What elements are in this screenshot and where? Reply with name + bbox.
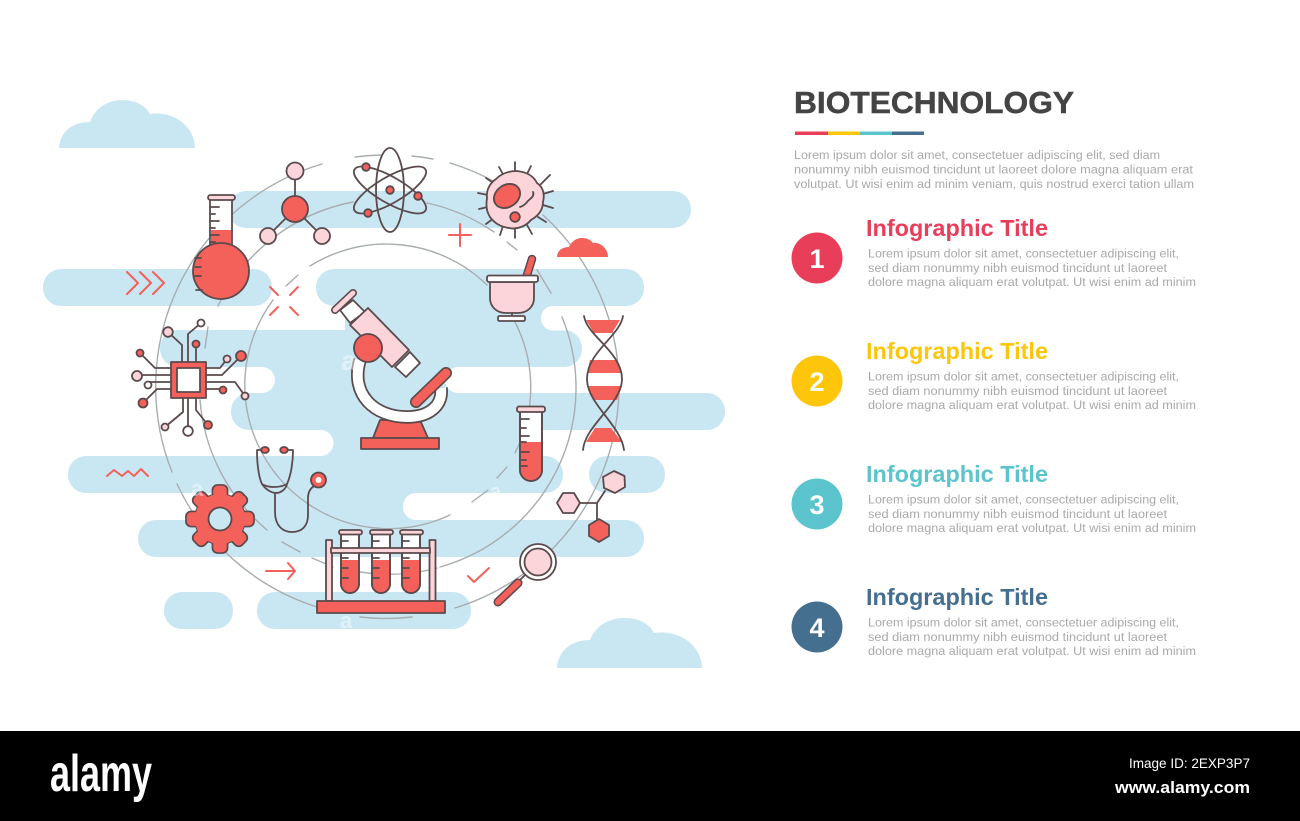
icon: mortar and pestle (487, 259, 538, 321)
watermark marks: a (341, 345, 357, 376)
website: www.alamy.com (1114, 778, 1250, 797)
footer logo: alamy (50, 745, 152, 803)
number badge 2: 2 (809, 367, 825, 397)
item 2 text: dolore magna aliquam erat volutpat. Ut wisi enim ad minim (868, 398, 1196, 412)
icon: circuit chip with nodes (132, 320, 248, 436)
item 3 text: Lorem ipsum dolor sit amet, consectetuer adipiscing elit, (868, 492, 1179, 506)
icon: round-bottom flask (193, 195, 249, 299)
intro paragraph (794, 148, 1194, 191)
decorative red cross burst (270, 287, 298, 315)
item 2 title: Infographic Title (866, 338, 1048, 364)
icon: magnifier (498, 544, 556, 602)
list item 1 (792, 215, 1196, 289)
number badge 3 (792, 478, 842, 530)
item 1 text (868, 246, 1196, 289)
icon: stethoscope (257, 447, 326, 532)
cloud bottom right (557, 618, 702, 668)
number badge 4: 4 (809, 613, 825, 643)
list item 2 (792, 338, 1196, 412)
item 1 text: Lorem ipsum dolor sit amet, consectetuer adipiscing elit, (868, 246, 1179, 260)
decorative red zigzag (107, 469, 148, 476)
intro paragraph: nonummy nibh euismod tincidunt ut laoreet dolore magna aliquam erat (794, 162, 1194, 176)
decorative red plus (449, 224, 471, 246)
item 4 text: dolore magna aliquam erat volutpat. Ut wisi enim ad minim (868, 644, 1196, 658)
icon: test tube (517, 406, 545, 481)
watermark marks: a (490, 481, 502, 503)
item 3 text: sed diam nonummy nibh euismod tincidunt ut laoreet (868, 507, 1168, 521)
footer bar (0, 731, 1300, 821)
icon: gear (186, 485, 254, 553)
item 3 text (868, 492, 1196, 535)
icon: molecule with three atoms (260, 162, 330, 244)
item 1 text: dolore magna aliquam erat volutpat. Ut wisi enim ad minim (868, 275, 1196, 289)
decorative red cloud (557, 238, 608, 257)
title: BIOTECHNOLOGY (794, 85, 1074, 120)
decorative red arrow (266, 563, 295, 579)
item 3 text: dolore magna aliquam erat volutpat. Ut wisi enim ad minim (868, 521, 1196, 535)
item 2 text: sed diam nonummy nibh euismod tincidunt ut laoreet (868, 384, 1168, 398)
cloud top left (59, 100, 195, 148)
item 1 title: Infographic Title (866, 215, 1048, 241)
item 2 text (868, 370, 1196, 412)
intro paragraph: Lorem ipsum dolor sit amet, consectetuer adipiscing elit, sed diam (794, 148, 1160, 162)
number badge 4 (792, 602, 842, 652)
item 4 text: Lorem ipsum dolor sit amet, consectetuer adipiscing elit, (868, 616, 1179, 630)
number badge 1 (792, 232, 842, 284)
title underline color bar (795, 132, 924, 135)
item 1 text: sed diam nonummy nibh euismod tincidunt ut laoreet (868, 261, 1168, 275)
icon: DNA helix (583, 316, 624, 450)
icon: hexagon molecule (557, 471, 625, 542)
watermark marks: a (191, 476, 204, 501)
icon: microscope (335, 293, 446, 449)
background blue bars (43, 191, 745, 629)
number badge 3: 3 (809, 490, 825, 520)
item 4 text: sed diam nonummy nibh euismod tincidunt ut laoreet (868, 630, 1168, 644)
watermark marks (191, 345, 502, 633)
icon: atom (348, 148, 432, 232)
list item 3 (792, 461, 1196, 535)
watermark marks: a (340, 608, 353, 633)
icon: test tube rack (317, 530, 445, 613)
item 4 text (868, 616, 1196, 658)
item 2 text: Lorem ipsum dolor sit amet, consectetuer adipiscing elit, (868, 370, 1179, 384)
number badge 2 (792, 356, 842, 406)
decorative red chevrons (127, 272, 164, 294)
decorative red check mark (468, 568, 489, 582)
number badge 1: 1 (809, 244, 825, 274)
list item 4 (792, 584, 1196, 658)
concentric dashed rings (156, 155, 619, 618)
icon: cell (478, 162, 553, 238)
image id: Image ID: 2EXP3P7 (1129, 755, 1250, 771)
item 4 title: Infographic Title (866, 584, 1048, 610)
item 3 title: Infographic Title (866, 461, 1048, 487)
intro paragraph: volutpat. Ut wisi enim ad minim veniam, quis nostrud exerci tation ullam (794, 177, 1194, 191)
